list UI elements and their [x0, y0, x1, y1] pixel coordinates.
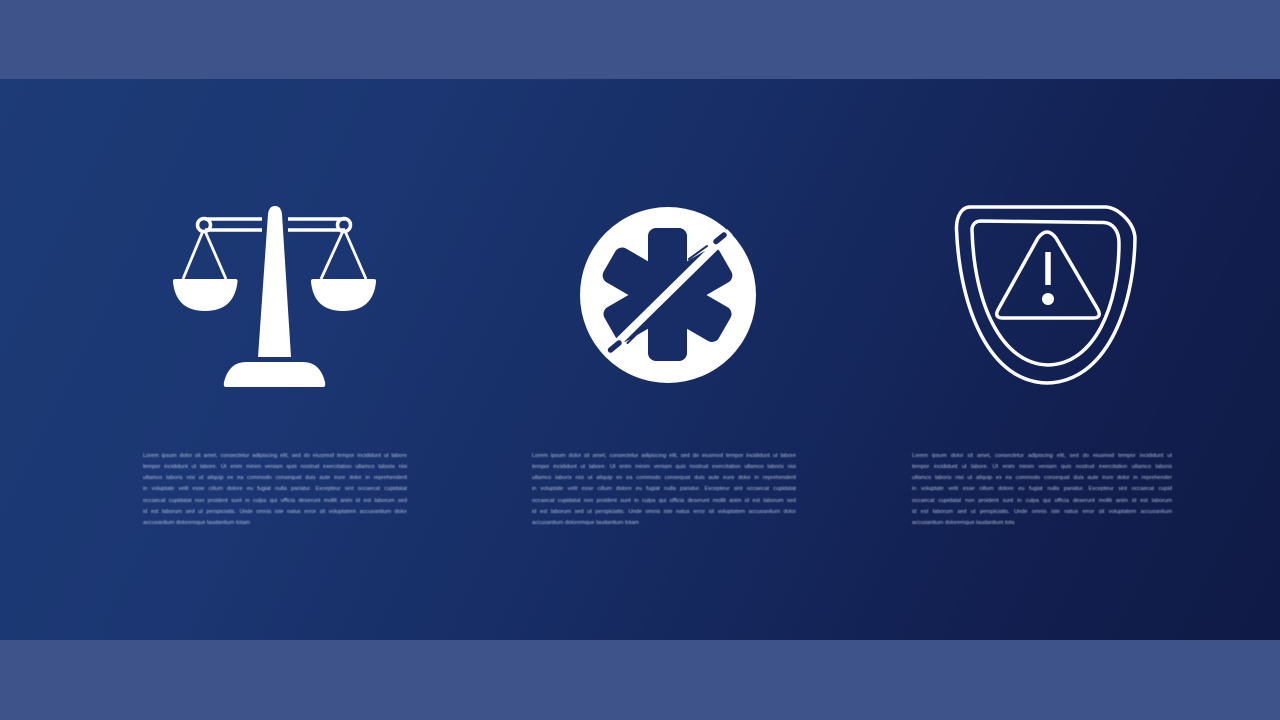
text block: left column: in voluptate velit esse cillum dolore eu fugiat nulla pariatur. Excepteur sint occaecat cupidatat	[143, 486, 407, 492]
text block: left column: tempor incididunt ut labore. Ut enim minim veniam quis nostrud exercitation ullamco laboris nisi	[143, 464, 407, 470]
text block: left column: id est laborum sed ut perspiciatis. Unde omnis iste natus error sit voluptatem accusantium dolor	[143, 509, 407, 515]
text block: right column	[912, 452, 1172, 526]
text block: middle column: tempor incididunt ut labore. Ut enim minim veniam quis nostrud exercitation ullamco laboris nisi	[532, 464, 796, 470]
main dark panel	[0, 79, 1280, 640]
text block: middle column: accusantium doloremque laudantium totam	[532, 520, 639, 526]
text block: middle column: id est laborum sed ut perspiciatis. Unde omnis iste natus error sit voluptatem accusantium dolor	[532, 509, 796, 515]
bottom band	[0, 640, 1280, 720]
text block: left column: occaecat cupidatat non proident sunt in culpa qui officia deserunt mollit anim id est laborum sed	[143, 498, 407, 504]
text block: middle column: ullamco laboris nisi ut aliquip ex ea commodo consequat duis aute irure dolor in reprehenderit	[532, 475, 796, 481]
text block: right column: ullamco laboris nisi ut aliquip ex ea commodo consequat duis aute irure dolor in reprehender	[912, 475, 1172, 481]
text block: right column: accusantium doloremque laudantium tota	[912, 520, 1014, 526]
icon: crossed-out medical star	[580, 207, 756, 383]
text block: left column: accusantium doloremque laudantium totam	[143, 520, 250, 526]
top band	[0, 0, 1280, 79]
text block: right column: in voluptate velit esse cillum dolore eu fugiat nulla pariatur. Excepteur sint occaecat cupid	[912, 486, 1172, 492]
icon: warning shield	[956, 207, 1135, 383]
text block: right column: tempor incididunt ut labore. Ut enim minim veniam quis nostrud exercitation ullamco laboris	[912, 464, 1172, 470]
text block: left column: Lorem ipsum dolor sit amet, consectetur adipiscing elit, sed do eiusmod tempor incididunt ut labore	[143, 452, 407, 458]
text block: left column: ullamco laboris nisi ut aliquip ex ea commodo consequat duis aute irure dolor in reprehenderit	[143, 475, 407, 481]
text block: middle column: occaecat cupidatat non proident sunt in culpa qui officia deserunt mollit anim id est laborum sed	[532, 498, 796, 504]
text block: right column: occaecat cupidatat non proident sunt in culpa qui officia deserunt mollit anim id est laborum	[912, 498, 1172, 504]
text block: middle column: Lorem ipsum dolor sit amet, consectetur adipiscing elit, sed do eiusmod tempor incididunt ut labore	[532, 452, 796, 458]
icon: balance scale	[173, 206, 376, 387]
text block: right column: Lorem ipsum dolor sit amet, consectetur adipiscing elit, sed do eiusmod tempor incididunt ut	[912, 452, 1172, 458]
text block: middle column	[532, 452, 796, 526]
text block: middle column: in voluptate velit esse cillum dolore eu fugiat nulla pariatur. Excepteur sint occaecat cupidatat	[532, 486, 796, 492]
text block: right column: id est laborum sed ut perspiciatis. Unde omnis iste natus error sit voluptatem accusantium	[912, 509, 1172, 515]
text block: left column	[142, 452, 408, 526]
